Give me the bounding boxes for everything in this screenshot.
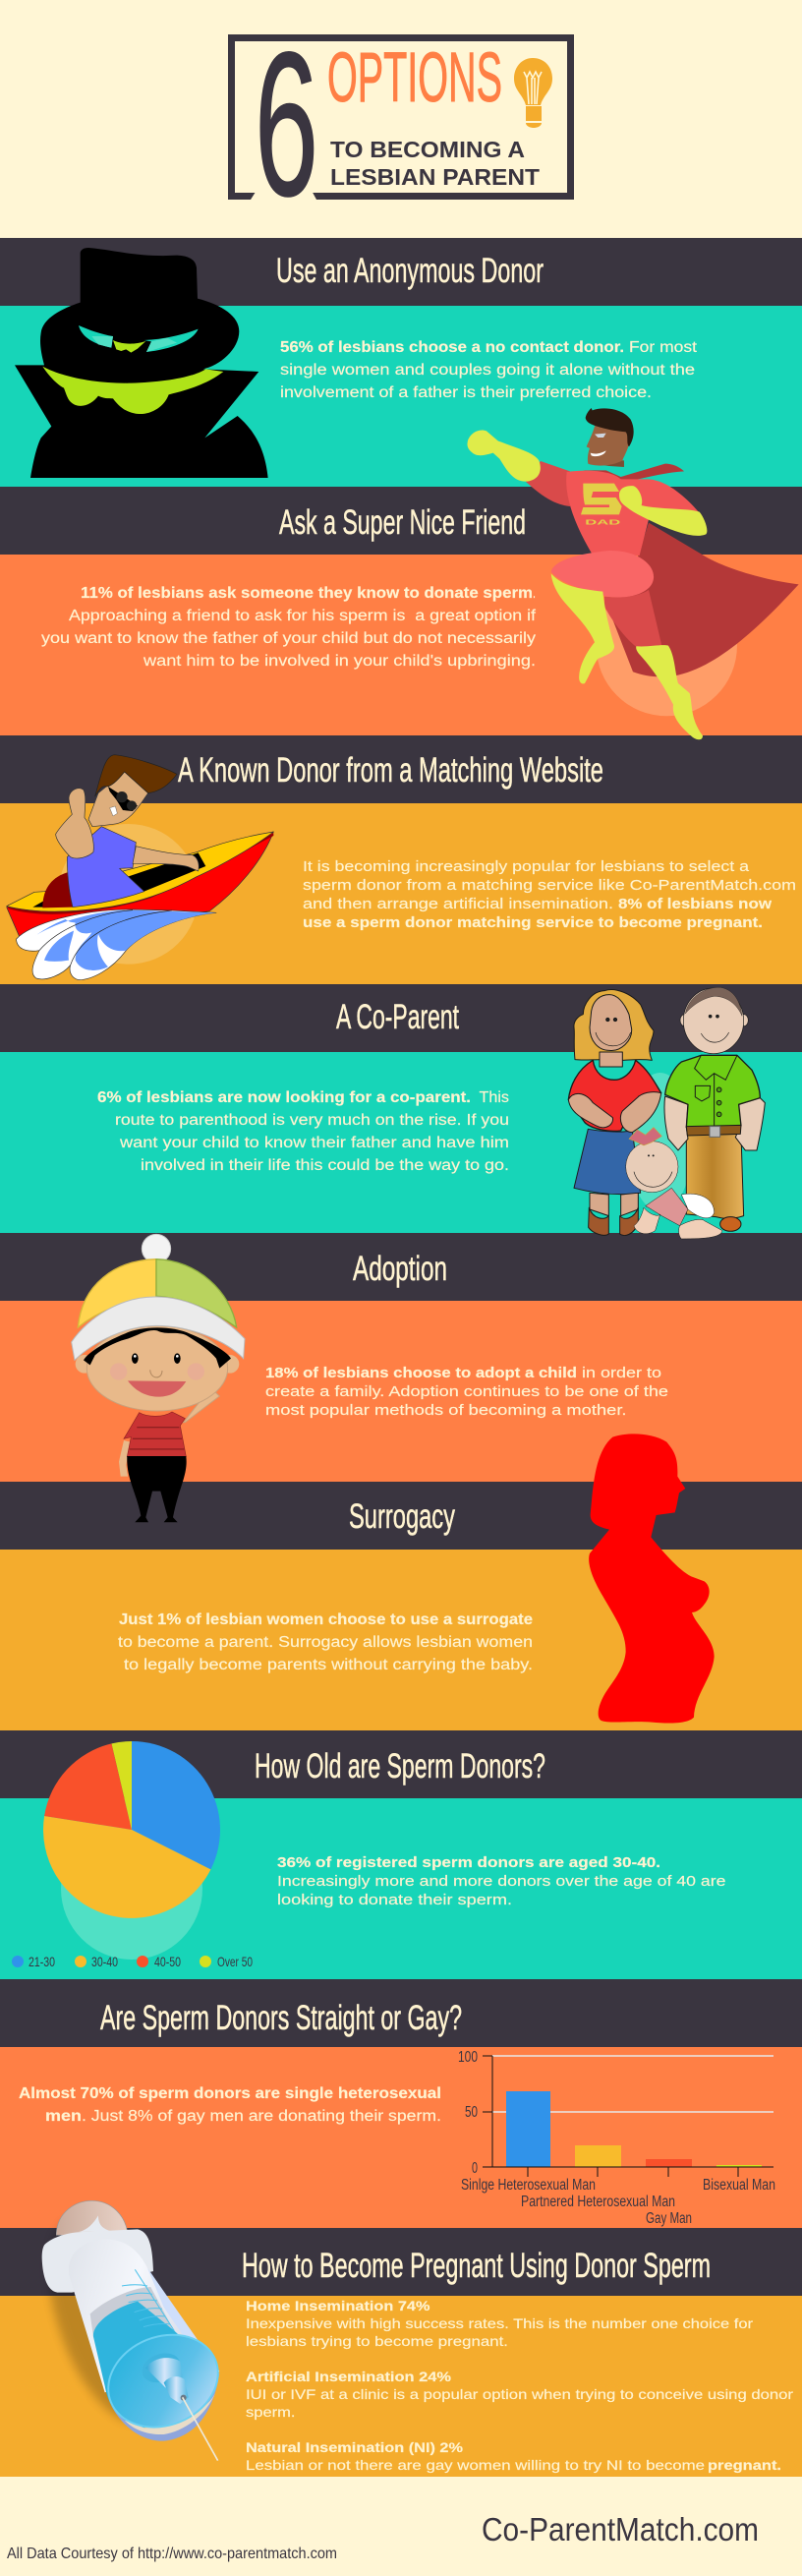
bar chart: sexuality of donors: 100 <box>458 2049 478 2066</box>
text block: super nice friend: you want to know the father of your child but do not necessarily <box>41 630 536 647</box>
heading: straight or gay: Are Sperm Donors Straight or Gay? <box>100 1999 462 2037</box>
title: LESBIAN PARENT <box>330 164 540 190</box>
text block: matching website: 8% of lesbians now <box>618 896 772 912</box>
legend: donor ages: Over 50 <box>217 1954 253 1969</box>
text block: matching website <box>303 858 796 931</box>
text block: anonymous donor: 56% of lesbians choose a no contact donor. <box>280 339 624 356</box>
text block: co-parent: want your child to know their father and have him <box>119 1135 509 1151</box>
text block: co-parent <box>97 1089 509 1174</box>
bar chart: sexuality of donors: 50 <box>465 2104 478 2121</box>
illustration: spy <box>15 248 268 478</box>
title: OPTIONS <box>327 39 502 117</box>
text block: artificial insemination <box>246 2369 793 2420</box>
text block: co-parent: This <box>480 1089 509 1106</box>
icon: light bulb <box>514 58 552 128</box>
panel: how to become pregnant <box>0 2228 802 2477</box>
text block: donor ages <box>277 1854 725 1908</box>
text block: straight or gay <box>19 2085 441 2125</box>
bar chart: sexuality of donors <box>458 2049 775 2227</box>
text block: co-parent: 6% of lesbians are now looking for a co-parent. <box>97 1089 471 1106</box>
heading: ask a super nice friend: Ask a Super Nice Friend <box>279 503 526 542</box>
text block: straight or gay: men <box>45 2108 82 2125</box>
text block: anonymous donor: single women and couples going it alone without the <box>280 362 695 379</box>
heading: how old are sperm donors: How Old are Sperm Donors? <box>255 1747 545 1786</box>
text block: anonymous donor <box>280 339 698 401</box>
text block: surrogacy: Just 1% of lesbian women choose to use a surrogate <box>119 1611 533 1628</box>
text block: home insemination: Inexpensive with high success rates. This is the number one choice for <box>246 2315 753 2331</box>
panel: adoption <box>0 1233 802 1482</box>
text block: natural insemination: pregnant. <box>708 2457 781 2473</box>
title <box>228 11 574 239</box>
text block: natural insemination: Lesbian or not there are gay women willing to try NI to become <box>246 2457 705 2473</box>
text block: matching website: and then arrange artificial insemination. <box>303 896 613 912</box>
bar chart: sexuality of donors: Sinlge Heterosexual Man <box>461 2177 596 2194</box>
pie chart: donor ages <box>43 1741 220 1960</box>
text block: home insemination <box>246 2298 753 2349</box>
text block: super nice friend <box>41 585 537 670</box>
text block: co-parent: route to parenthood is very much on the rise. If you <box>115 1112 509 1129</box>
text block: artificial insemination: IUI or IVF at a clinic is a popular option when trying to conceive using donor <box>246 2386 793 2402</box>
illustration: syringe <box>25 2200 232 2461</box>
panel: known donor from a matching website <box>0 735 802 984</box>
text block: super nice friend: . <box>533 585 536 602</box>
illustration: superhero <box>467 408 799 739</box>
panel: how old are sperm donors <box>0 1730 802 1979</box>
text block: matching website: use a sperm donor matching service to become pregnant. <box>303 914 763 931</box>
bar chart: sexuality of donors: 0 <box>472 2160 478 2177</box>
text block: artificial insemination: sperm. <box>246 2404 295 2420</box>
text block: super nice friend: want him to be involved in your child's upbringing. <box>143 653 536 670</box>
text block: adoption: 18% of lesbians choose to adopt a child <box>265 1365 577 1381</box>
text block: straight or gay: Almost 70% of sperm donors are single heterosexual <box>19 2085 441 2102</box>
illustration: child with hat <box>72 1234 245 1522</box>
bar chart: sexuality of donors: Gay Man <box>646 2210 692 2227</box>
text block: super nice friend: 11% of lesbians ask someone they know to donate sperm <box>81 585 533 602</box>
panel: a co-parent <box>0 984 802 1233</box>
text block: home insemination: lesbians trying to become pregnant. <box>246 2333 508 2349</box>
panel: straight or gay <box>0 1979 802 2228</box>
text block: donor ages: 36% of registered sperm donors are aged 30-40. <box>277 1854 660 1871</box>
legend: donor ages: 40-50 <box>154 1954 181 1969</box>
heading: known donor: A Known Donor from a Matching Website <box>178 751 603 790</box>
heading: surrogacy: Surrogacy <box>349 1497 455 1536</box>
legend: donor ages <box>12 1954 253 1969</box>
footer brand: Co-ParentMatch.com <box>482 2511 759 2547</box>
text block: anonymous donor: For most <box>629 339 698 356</box>
illustration: man in speedboat <box>7 755 273 980</box>
panel: ask a super nice friend <box>0 487 802 735</box>
text block: surrogacy <box>118 1611 533 1673</box>
heading: a co-parent: A Co-Parent <box>336 998 459 1036</box>
legend: donor ages: 21-30 <box>29 1954 55 1969</box>
text block: matching website: sperm donor from a matching service like Co-ParentMatch.com <box>303 877 796 894</box>
bar chart: sexuality of donors: Bisexual Man <box>703 2177 775 2194</box>
illustration: superhero: DAD <box>585 518 620 527</box>
bar chart: sexuality of donors: Partnered Heterosexual Man <box>521 2194 675 2210</box>
legend: donor ages: 30-40 <box>91 1954 118 1969</box>
text block: natural insemination: Natural Insemination (NI) 2% <box>246 2439 464 2455</box>
text block: natural insemination <box>246 2439 781 2473</box>
text block: adoption <box>265 1365 668 1419</box>
text block: adoption: create a family. Adoption continues to be one of the <box>265 1383 668 1400</box>
text block: artificial insemination: Artificial Insemination 24% <box>246 2369 452 2384</box>
text block: anonymous donor: involvement of a father is their preferred choice. <box>280 384 652 401</box>
text block: co-parent: involved in their life this could be the way to go. <box>141 1157 509 1174</box>
panel: use an anonymous donor <box>0 238 802 487</box>
text block: donor ages: Increasingly more and more donors over the age of 40 are <box>277 1873 725 1890</box>
text block: surrogacy: to become a parent. Surrogacy allows lesbian women <box>118 1634 533 1651</box>
text block: adoption: in order to <box>582 1365 661 1381</box>
footer source: All Data Courtesy of http://www.co-parentmatch.com <box>7 2546 337 2562</box>
illustration: pregnant silhouette <box>589 1434 715 1724</box>
text block: home insemination: Home Insemination 74% <box>246 2298 430 2313</box>
text block: super nice friend: Approaching a friend to ask for his sperm is a great option if <box>69 608 537 624</box>
title: 6 <box>255 11 318 239</box>
text block: donor ages: looking to donate their sperm. <box>277 1892 512 1908</box>
heading: use an anonymous donor: Use an Anonymous Donor <box>276 252 544 290</box>
title: TO BECOMING A <box>330 137 525 162</box>
text block: straight or gay: . Just 8% of gay men are donating their sperm. <box>82 2108 441 2125</box>
text block: adoption: most popular methods of becoming a mother. <box>265 1402 627 1419</box>
heading: adoption: Adoption <box>353 1250 447 1288</box>
illustration: family <box>568 987 765 1239</box>
panel: surrogacy <box>0 1482 802 1730</box>
text block: matching website: It is becoming increasingly popular for lesbians to select a <box>303 858 750 875</box>
text block: surrogacy: to legally become parents without carrying the baby. <box>124 1657 533 1673</box>
